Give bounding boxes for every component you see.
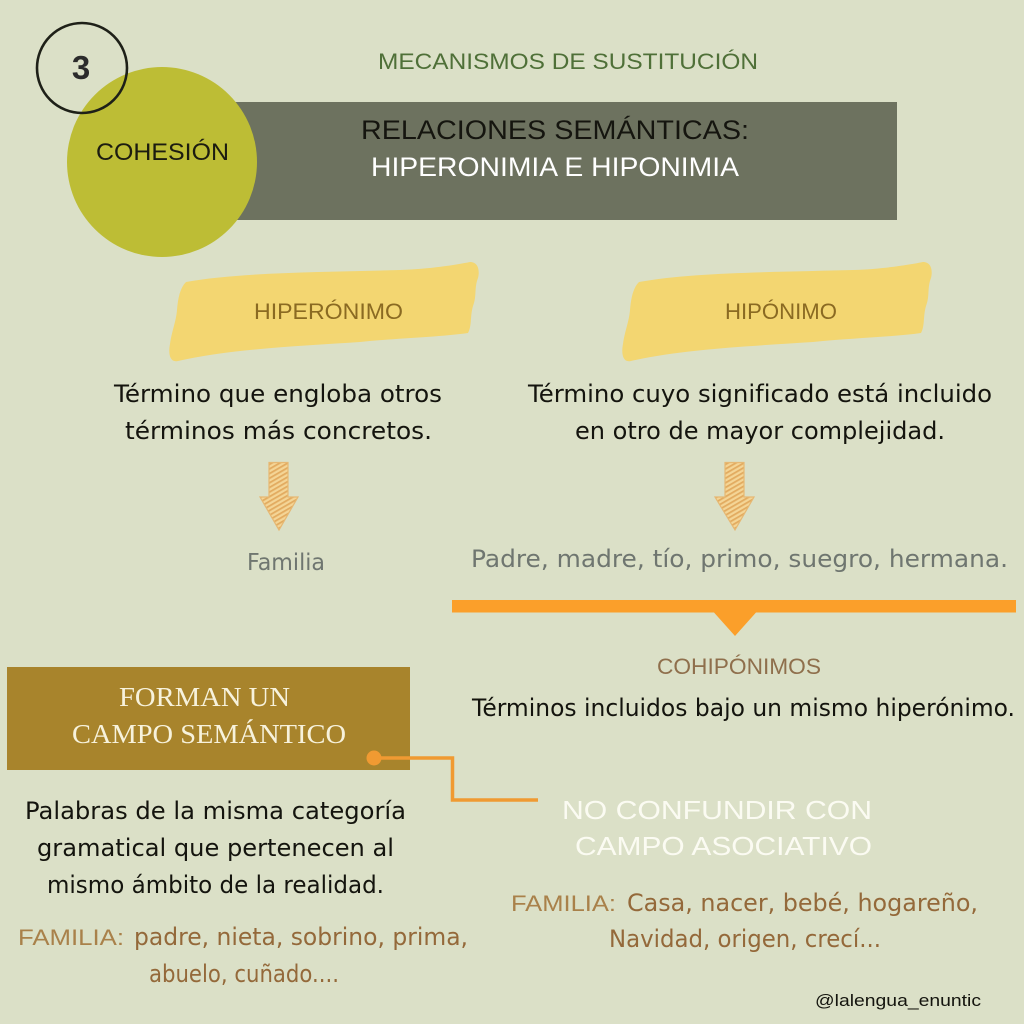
text: hyperonym definition: términos más concretos. — [125, 417, 432, 445]
text: hyponym definition: Término cuyo significado está incluido — [527, 380, 992, 408]
text: semantic field definition: mismo ámbito de la realidad. — [47, 871, 384, 899]
heading: do not confuse with associative field: CAMPO ASOCIATIVO — [575, 831, 872, 861]
credit handle: @lalengua_enuntic — [815, 991, 982, 1010]
text: semantic field examples: padre, nieta, sobrino, prima, — [134, 923, 468, 951]
badge: cohesion circle — [67, 67, 257, 257]
text: associative field examples: Casa, nacer, bebé, hogareño, — [627, 889, 978, 917]
label: hyponym brush stroke — [622, 262, 932, 361]
text: associative field examples: Navidad, origen, crecí... — [609, 925, 881, 953]
label: hyperonym brush stroke: HIPERÓNIMO — [254, 299, 403, 324]
panel: semantic field — [7, 667, 410, 770]
text: associative field examples: FAMILIA: — [511, 891, 616, 916]
text: hyponym definition — [527, 380, 992, 445]
text: semantic field examples — [18, 923, 468, 988]
arrow: hyponym down — [715, 462, 754, 530]
panel: semantic field: FORMAN UN — [119, 682, 290, 712]
label: hyperonym brush stroke — [169, 262, 479, 361]
badge: number 3: 3 — [72, 49, 90, 86]
divider bar with pointer — [452, 600, 1016, 636]
text: hyperonym definition — [113, 380, 442, 445]
panel: title banner — [225, 102, 897, 220]
text: hyperonym definition: Término que engloba otros — [113, 380, 442, 408]
badge: number 3 — [37, 23, 127, 113]
text: semantic field definition — [25, 797, 406, 899]
connector line — [366, 750, 538, 800]
heading: hyperonymy and hyponymy: HIPERONIMIA E HIPONIMIA — [371, 152, 739, 182]
heading: do not confuse with associative field — [562, 795, 872, 861]
text: semantic field definition: gramatical que pertenecen al — [37, 834, 394, 862]
text: hyperonym example: Familia — [247, 550, 325, 576]
heading: do not confuse with associative field: NO CONFUNDIR CON — [562, 795, 872, 825]
panel: semantic field: CAMPO SEMÁNTICO — [72, 719, 346, 749]
heading: semantic relations: RELACIONES SEMÁNTICAS: — [361, 115, 749, 145]
text: semantic field examples: abuelo, cuñado.... — [149, 960, 339, 988]
text: hyponym definition: en otro de mayor complejidad. — [575, 417, 945, 445]
heading: co-hyponyms: COHIPÓNIMOS — [657, 654, 821, 679]
text: semantic field definition: Palabras de la misma categoría — [25, 797, 406, 825]
text: co-hyponyms definition: Términos incluidos bajo un mismo hiperónimo. — [471, 694, 1015, 722]
text: associative field examples — [511, 889, 978, 953]
text: semantic field examples: FAMILIA: — [18, 925, 124, 950]
badge: cohesion circle: COHESIÓN — [96, 139, 229, 166]
text: hyponym examples: Padre, madre, tío, primo, suegro, hermana. — [471, 545, 1008, 573]
label: hyponym brush stroke: HIPÓNIMO — [725, 299, 837, 324]
subtitle: MECANISMOS DE SUSTITUCIÓN — [378, 49, 758, 74]
arrow: hyperonym down — [260, 462, 298, 530]
